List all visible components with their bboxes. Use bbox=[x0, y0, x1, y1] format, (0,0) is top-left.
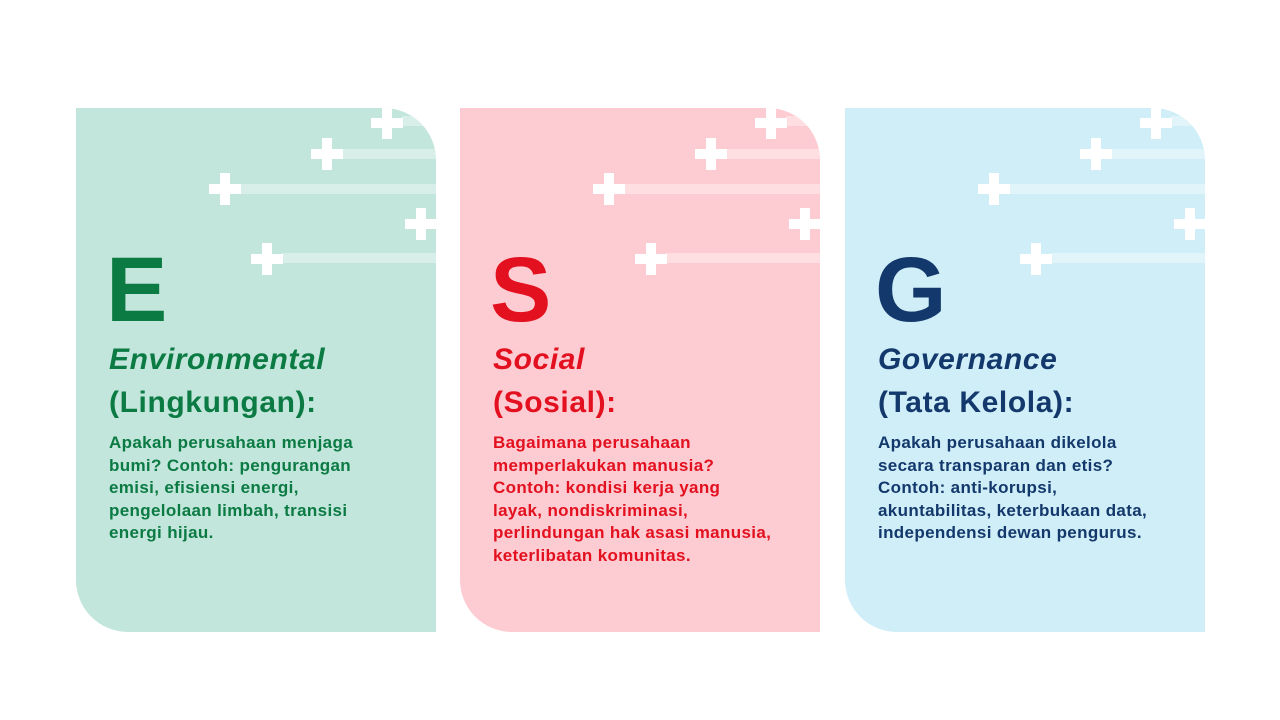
icon: plus bbox=[1080, 138, 1112, 170]
text block bbox=[109, 433, 353, 542]
text block: pengelolaan limbah, transisi bbox=[109, 500, 347, 520]
text block: memperlakukan manusia? bbox=[493, 456, 714, 474]
heading: (Lingkungan): bbox=[109, 386, 317, 419]
text block: Contoh: anti-korupsi, bbox=[878, 478, 1057, 497]
text block: layak, nondiskriminasi, bbox=[493, 500, 688, 520]
icon: plus bbox=[209, 173, 241, 205]
icon: plus bbox=[405, 208, 437, 240]
heading bbox=[109, 343, 326, 419]
icon: plus bbox=[635, 243, 667, 275]
heading: (Sosial): bbox=[493, 386, 617, 419]
heading bbox=[878, 343, 1074, 419]
panel: environmental bbox=[76, 108, 436, 632]
letter E: E bbox=[106, 239, 165, 341]
text block: keterlibatan komunitas. bbox=[493, 546, 691, 564]
text block: emisi, efisiensi energi, bbox=[109, 478, 299, 497]
icon: plus bbox=[371, 107, 403, 139]
panel: social bbox=[460, 108, 820, 632]
panel: governance bbox=[845, 108, 1205, 632]
text block: akuntabilitas, keterbukaan data, bbox=[878, 500, 1147, 520]
letter G: G bbox=[875, 239, 945, 341]
text block: independensi dewan pengurus. bbox=[878, 523, 1142, 542]
text block: Bagaimana perusahaan bbox=[493, 433, 691, 452]
heading: Environmental bbox=[109, 343, 325, 376]
text block: secara transparan dan etis? bbox=[878, 456, 1113, 474]
text block bbox=[493, 433, 771, 564]
icon: plus bbox=[789, 208, 821, 240]
heading: (Tata Kelola): bbox=[878, 386, 1074, 419]
text block: bumi? Contoh: pengurangan bbox=[109, 456, 351, 474]
icon: plus bbox=[593, 173, 625, 205]
text block: perlindungan hak asasi manusia, bbox=[493, 523, 771, 542]
icon: plus bbox=[755, 107, 787, 139]
icon: plus bbox=[1140, 107, 1172, 139]
text block: Apakah perusahaan dikelola bbox=[878, 433, 1117, 452]
heading: Social bbox=[493, 343, 585, 376]
heading: Governance bbox=[878, 343, 1057, 376]
heading bbox=[493, 343, 617, 419]
letter S: S bbox=[490, 239, 549, 341]
text block: Apakah perusahaan menjaga bbox=[109, 433, 353, 452]
text block: Contoh: kondisi kerja yang bbox=[493, 478, 720, 497]
icon: plus bbox=[1174, 208, 1206, 240]
icon: plus bbox=[251, 243, 283, 275]
text block bbox=[878, 433, 1147, 542]
icon: plus bbox=[311, 138, 343, 170]
text block: energi hijau. bbox=[109, 523, 214, 542]
icon: plus bbox=[978, 173, 1010, 205]
icon: plus bbox=[1020, 243, 1052, 275]
icon: plus bbox=[695, 138, 727, 170]
